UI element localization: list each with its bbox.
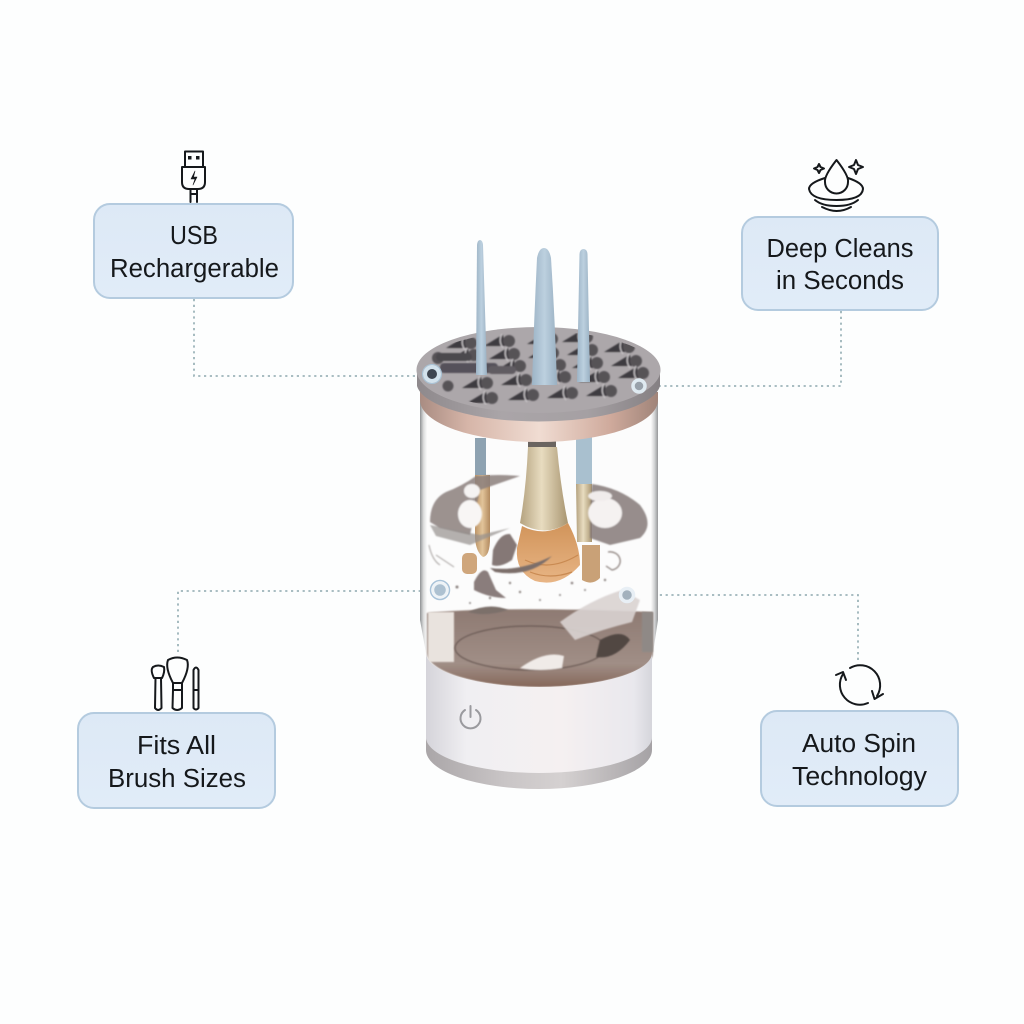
hotspot: water left [430, 580, 450, 600]
callout: Auto Spin Technology [761, 711, 958, 806]
callout: USB Rechargerable: Rechargerable [110, 255, 279, 283]
product illustration: brush cleaner [416, 240, 660, 789]
connector: Deep Cleans [652, 311, 841, 386]
callout: USB Rechargerable: USB [170, 222, 218, 250]
base foot ring [426, 737, 652, 789]
swirl highlights in the liquid [455, 590, 640, 670]
callout: Auto Spin Technology: Auto Spin [802, 730, 916, 758]
callout: Auto Spin Technology: Technology [792, 763, 927, 791]
lid rim [417, 372, 660, 421]
power icon [460, 706, 481, 728]
glass cylinder [420, 395, 658, 687]
brushes inside the glass [462, 435, 600, 583]
callout: USB Rechargerable [94, 204, 293, 298]
icon: three makeup brushes [152, 658, 198, 710]
icon: circular arrows [836, 665, 883, 705]
lid top surface [416, 327, 660, 413]
brush handles rising through the lid [476, 240, 590, 385]
callout: Deep Cleans in Seconds: in Seconds [776, 267, 904, 295]
hotspot: water right [620, 588, 634, 602]
callout: Deep Cleans in Seconds [742, 217, 938, 310]
callout: Fits All Brush Sizes [78, 713, 275, 808]
water foam and bubbles [429, 475, 648, 604]
hotspot: lid right [633, 380, 645, 392]
brown liquid [427, 609, 653, 687]
hotspot: lid left [422, 364, 442, 384]
icon: USB cable [182, 152, 205, 202]
callout: Deep Cleans in Seconds: Deep Cleans [766, 235, 914, 263]
rose gold band [420, 392, 658, 442]
connector: USB Rechargeable [194, 299, 420, 376]
connector: Auto Spin [638, 595, 858, 660]
callout: Fits All Brush Sizes: Brush Sizes [108, 765, 246, 793]
callout: Fits All Brush Sizes: Fits All [137, 732, 216, 760]
lid hole pattern [432, 330, 649, 405]
white base [426, 653, 652, 773]
icon: water drop with sparkles [809, 160, 863, 211]
connector: Fits All Brush Sizes [178, 591, 430, 652]
